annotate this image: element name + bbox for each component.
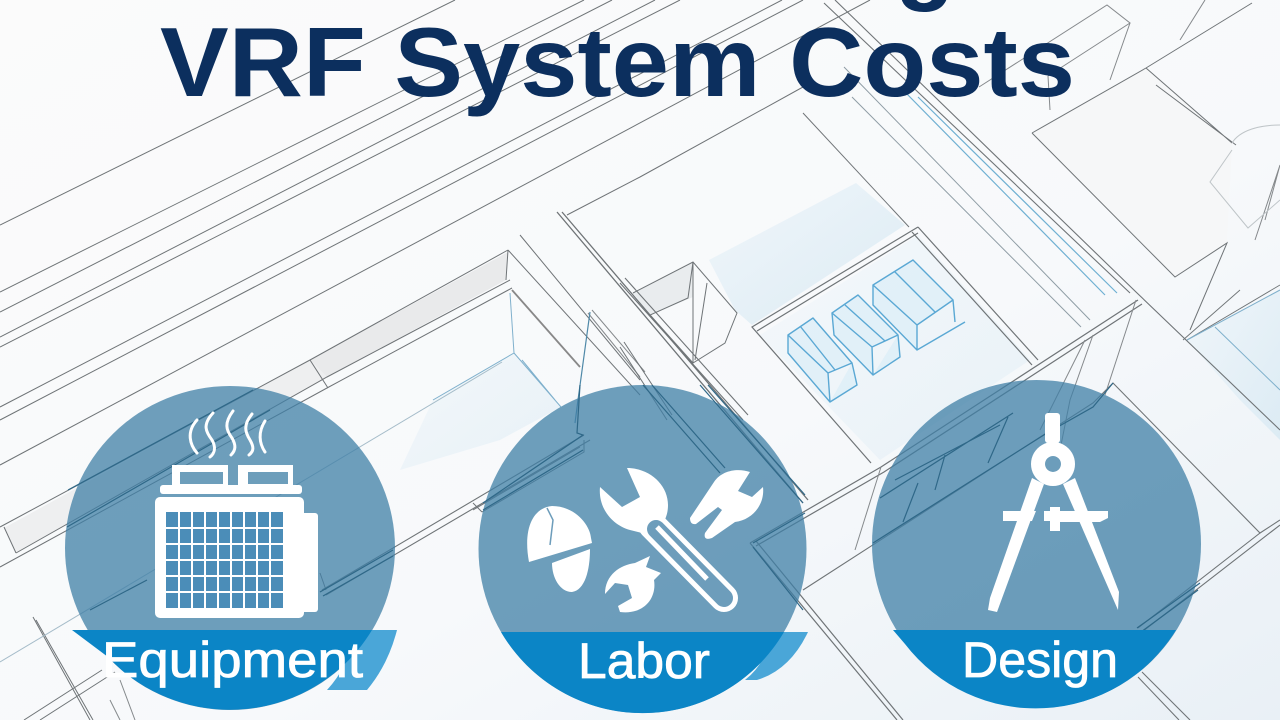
small central room	[633, 262, 737, 363]
labor banner accent	[745, 632, 808, 680]
left room details	[508, 235, 640, 395]
equipment circle	[65, 386, 395, 710]
equipment circle wall lines	[67, 390, 393, 610]
panel: equipment	[65, 386, 397, 710]
bottom left walls	[24, 617, 115, 720]
title	[160, 0, 1075, 117]
labor circle	[478, 385, 806, 713]
illustration: three blue VRF units	[788, 260, 965, 402]
equipment banner	[72, 630, 372, 710]
design banner	[893, 630, 1183, 708]
labor banner	[494, 632, 784, 713]
label: Design: Design	[962, 632, 1118, 688]
icon: steam	[190, 411, 265, 457]
icon: large wrench	[600, 468, 724, 598]
icon: small wrench bottom	[605, 556, 661, 612]
design circle wall lines	[873, 383, 1200, 632]
icon: hard hat	[527, 506, 592, 592]
labor circle wall lines	[483, 385, 805, 610]
icon: tools and hard hat	[527, 468, 763, 612]
label: Labor: Labor	[578, 633, 710, 689]
right panel	[1032, 3, 1252, 330]
design circle	[872, 380, 1201, 708]
label: Equipment: Equipment	[102, 632, 363, 688]
panel: labor	[478, 385, 808, 713]
lower right walls	[803, 383, 1280, 590]
central double wall	[557, 212, 808, 503]
panel: design	[872, 380, 1201, 708]
icon: drafting compass	[988, 413, 1119, 612]
icon: outdoor HVAC unit	[155, 411, 318, 618]
long diagonals	[0, 0, 680, 347]
upper center room	[803, 113, 909, 227]
title: main line: VRF System Costs	[160, 7, 1075, 117]
icon: small wrench top	[690, 470, 763, 539]
equipment banner accent	[327, 630, 397, 690]
